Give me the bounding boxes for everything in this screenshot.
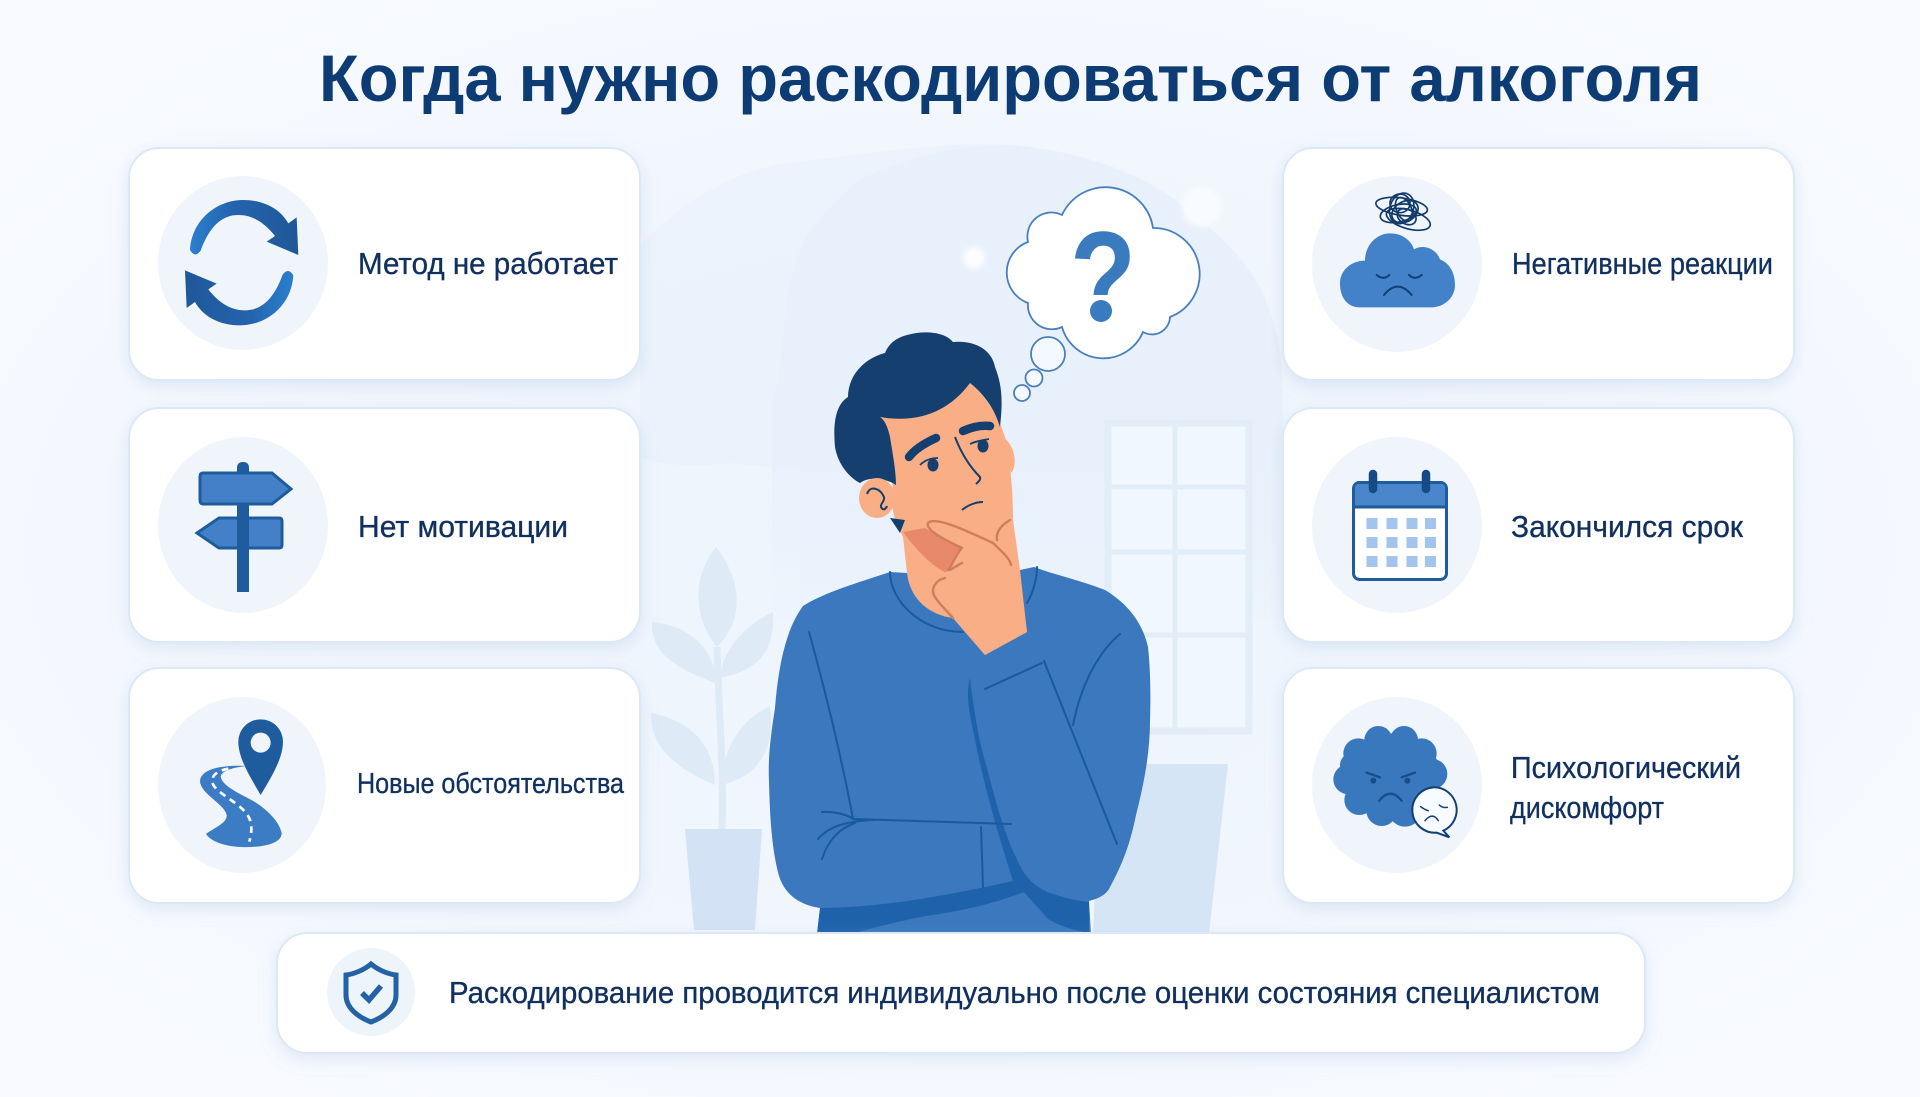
sweater fold lines [809,567,1120,887]
icon circle [327,948,415,1036]
neck shadow [903,528,962,573]
background window [1108,423,1249,731]
icon: sync arrows [185,200,298,325]
panel: negative reactions [1283,148,1794,380]
hair behind neck [890,518,905,533]
background blob inner [772,145,1283,620]
person [769,332,1150,934]
ear [859,478,895,518]
background plant [651,547,773,930]
icon: signpost [197,462,291,592]
icon: calendar [1354,474,1446,580]
thought cloud [1007,187,1200,401]
background blob outer [640,144,1283,620]
label: Нет мотивации [358,509,568,544]
label second line: дискомфорт [1510,790,1664,825]
question mark round dot [1082,296,1120,326]
panel: new circumstances [129,668,640,903]
eyes [920,439,989,472]
icon: shield with check [346,964,396,1022]
icon circle [158,176,328,350]
label: Новые обстоятельства [357,768,625,800]
neck and head skin [880,383,1027,655]
note text: Раскодирование проводится индивидуально после оценки состояния специалистом [449,975,1600,1010]
title: Когда нужно раскодироваться от алкоголя [319,41,1702,115]
eyebrows [909,426,990,457]
panel: method does not work [129,148,640,380]
icon circle [158,697,326,873]
icon: upset brain with speech bubble [1333,726,1457,837]
icon: road and pin [200,719,283,847]
mouth [962,502,983,510]
panel: no motivation [129,408,640,642]
icon: sad cloud with scribble [1340,190,1455,307]
label: Психологический [1511,750,1741,785]
panel: psychological discomfort [1283,668,1794,903]
icon circle [1312,697,1482,873]
right cheek [1003,437,1015,473]
decorative white dot right [1182,187,1222,227]
icon circle [158,437,328,613]
sweater shading [817,678,1089,934]
hair [834,332,1002,485]
bottom note panel [277,933,1645,1053]
label: Метод не работает [358,246,618,281]
label: Негативные реакции [1512,246,1773,281]
icon circle [1312,176,1482,352]
background chair [1093,764,1228,934]
sweater [769,567,1150,934]
decorative white dot left [963,247,985,269]
panel: term ended [1283,408,1794,642]
icon circle [1312,437,1482,613]
label: Закончился срок [1511,509,1743,544]
hand [928,520,1027,655]
nose [955,437,980,484]
question mark: ? [1070,204,1136,350]
